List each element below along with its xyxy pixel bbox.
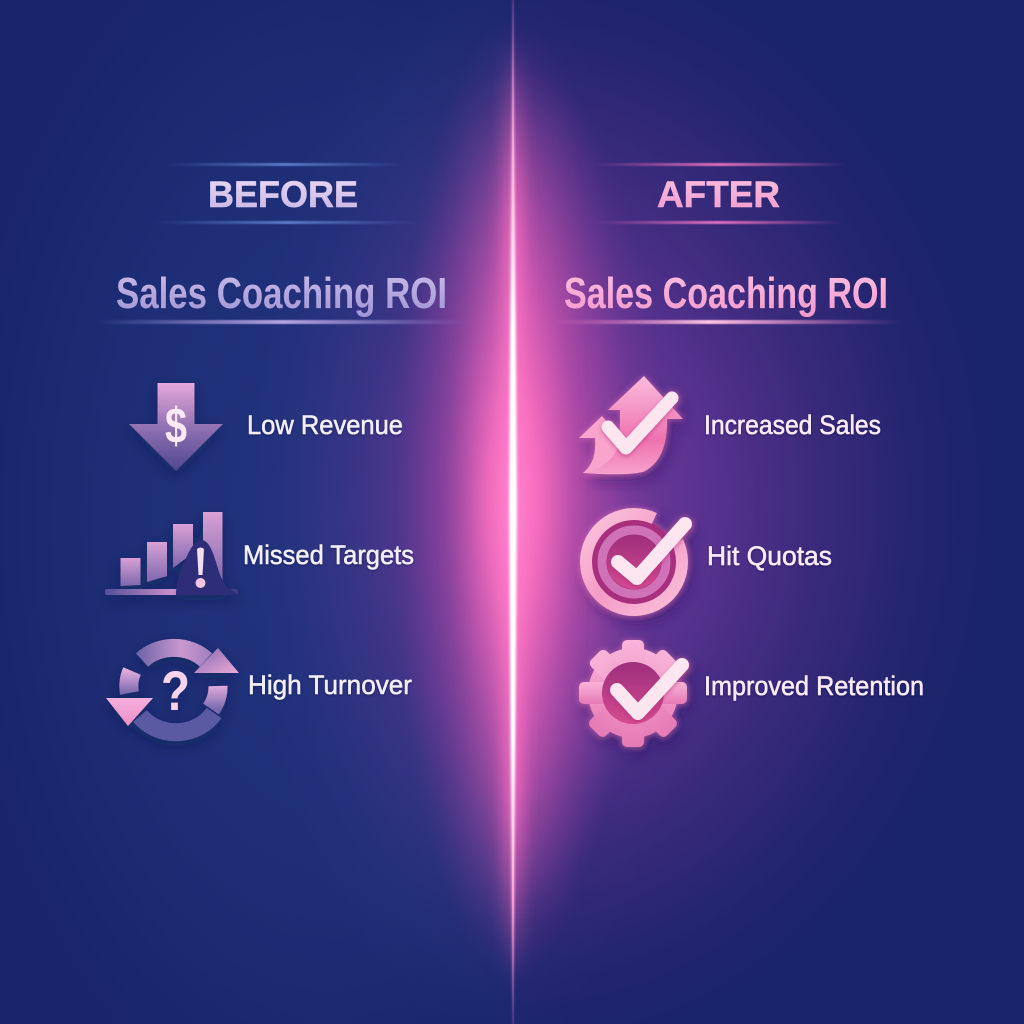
icon: turnover cycle with question mark: ?: [161, 659, 190, 722]
label: hit quotas: Hit Quotas: [707, 541, 832, 571]
label: missed targets: Missed Targets: [243, 540, 414, 570]
icon: target with check: [586, 514, 685, 610]
label: increased sales: Increased Sales: [704, 410, 881, 440]
heading: after: AFTER: [657, 174, 780, 215]
label: improved retention: Improved Retention: [704, 671, 924, 701]
icon: down arrow with dollar: $: [165, 398, 187, 454]
heading: after: [595, 163, 845, 224]
title: after: Sales Coaching ROI: [564, 269, 888, 318]
heading: before: [155, 163, 420, 224]
panel: after: [552, 163, 924, 747]
heading: before: BEFORE: [208, 174, 358, 215]
icon: gear with check: [579, 640, 687, 747]
label: low revenue: Low Revenue: [247, 410, 403, 440]
icon: rising arrows with check: [579, 376, 683, 474]
panel: before: [98, 163, 468, 732]
icon: turnover cycle with question mark: [106, 648, 239, 732]
title: before: Sales Coaching ROI: [116, 269, 447, 318]
icon: bar chart with warning: [105, 512, 238, 595]
label: high turnover: High Turnover: [248, 670, 412, 700]
central glowing divider: [490, 0, 536, 1024]
icon: down arrow with dollar: [129, 383, 223, 471]
